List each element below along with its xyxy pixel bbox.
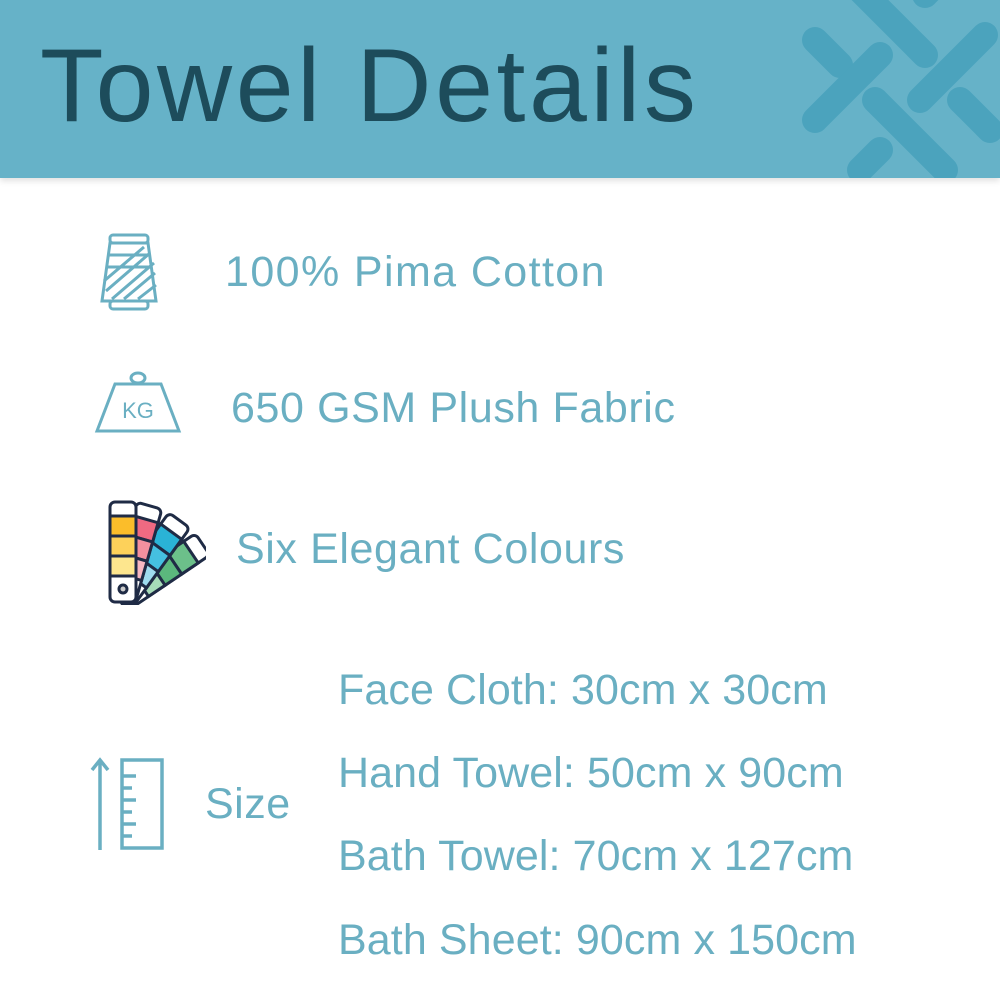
title: Towel Details — [40, 28, 699, 144]
icon: cotton spool — [100, 234, 158, 310]
text: colours: Six Elegant Colours — [236, 525, 625, 573]
icon: kg weight — [94, 372, 182, 432]
size list: Face Cloth: 30cm x 30cm — [338, 666, 828, 714]
icon: colour fan — [108, 500, 206, 605]
size list: Hand Towel: 50cm x 90cm — [338, 749, 844, 797]
icon: ruler — [90, 757, 164, 850]
size list: Bath Sheet: 90cm x 150cm — [338, 916, 857, 964]
icon: kg weight: KG — [122, 398, 154, 423]
text: gsm: 650 GSM Plush Fabric — [231, 384, 676, 432]
weave pattern — [802, 0, 1000, 178]
size list — [338, 666, 857, 964]
size list: Bath Towel: 70cm x 127cm — [338, 832, 853, 880]
text: cotton: 100% Pima Cotton — [225, 248, 606, 296]
text: size label: Size — [205, 780, 291, 828]
header banner — [0, 0, 1000, 178]
